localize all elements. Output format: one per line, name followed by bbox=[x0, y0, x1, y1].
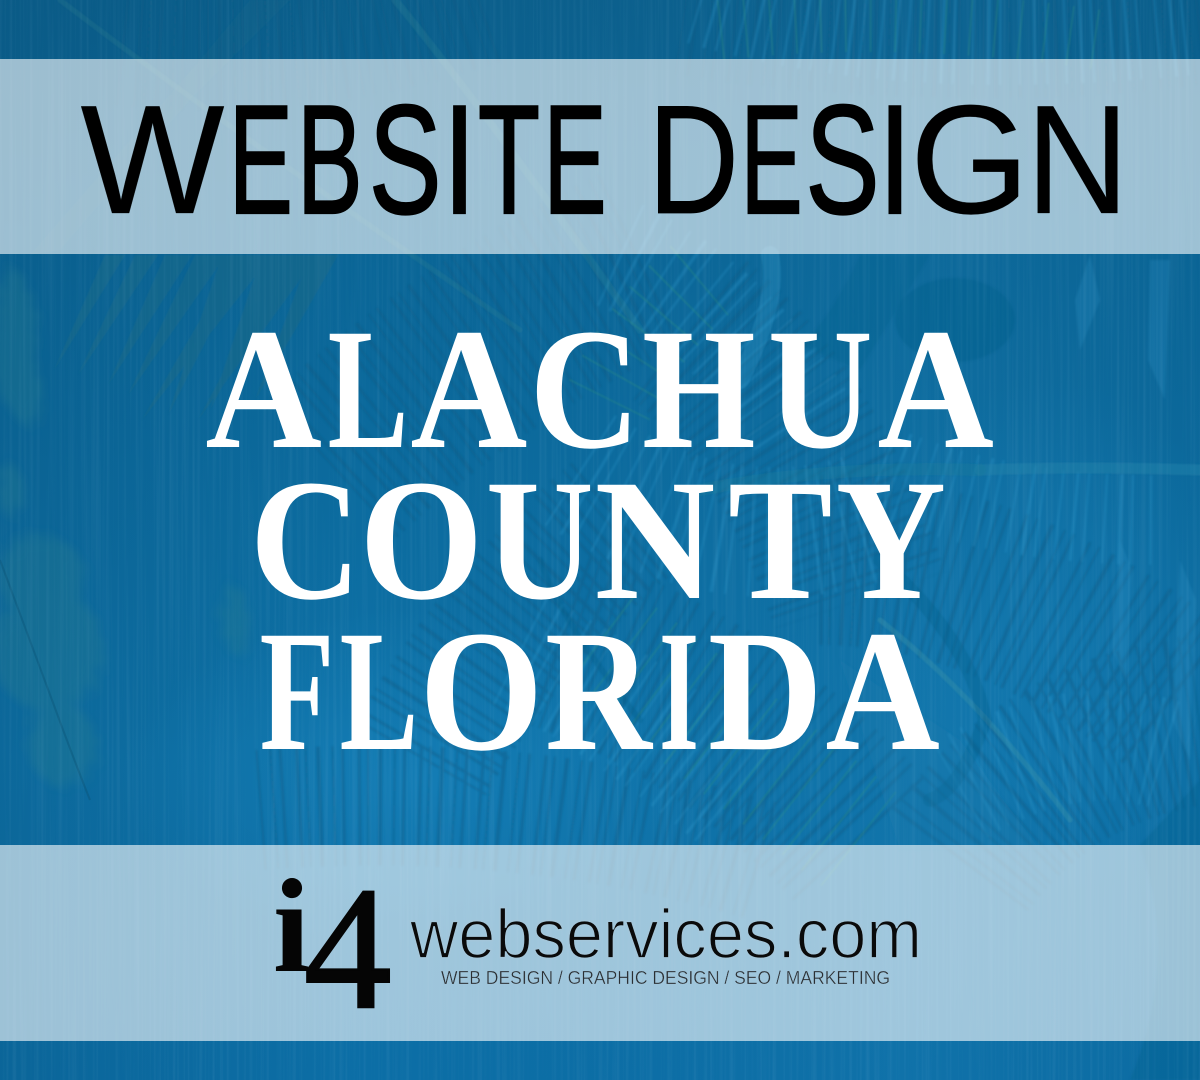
heading: website design: S bbox=[369, 73, 441, 246]
title line: alachua: L bbox=[328, 294, 408, 485]
left moss foliage bbox=[0, 270, 249, 787]
bottom translucent band bbox=[0, 845, 1200, 1041]
title line: county: T bbox=[728, 445, 832, 636]
title: alachua county florida bbox=[205, 294, 994, 787]
title line: alachua: C bbox=[529, 294, 640, 485]
heading: website design: N bbox=[1026, 73, 1129, 246]
title line: alachua: U bbox=[768, 294, 873, 485]
footer logo: i4 webservices.com bbox=[273, 851, 922, 1045]
title line: alachua: A bbox=[205, 294, 322, 485]
heading: website design: T bbox=[478, 73, 540, 246]
title line: alachua: A bbox=[877, 294, 994, 485]
title line: florida: F bbox=[260, 596, 334, 787]
palm frond combs dark bbox=[120, 0, 1200, 860]
palm frond combs light bbox=[520, 0, 1190, 800]
title line: florida: D bbox=[708, 596, 823, 787]
title line: county: U bbox=[486, 445, 594, 636]
pale right side blades bbox=[1075, 255, 1196, 760]
heading: website design: E bbox=[229, 73, 293, 246]
title line: alachua: H bbox=[642, 294, 756, 485]
title line: county: N bbox=[594, 445, 715, 636]
logo mark: i4: i bbox=[273, 852, 310, 1000]
title line: county: C bbox=[250, 445, 361, 636]
heading: website design: B bbox=[297, 73, 363, 246]
heading: website design: S bbox=[806, 73, 880, 246]
logo mark: i4: 4 bbox=[304, 851, 392, 1045]
title line: florida: I bbox=[659, 596, 699, 787]
heading: website design: G bbox=[910, 73, 1030, 246]
logo wordmark: webservices.com bbox=[409, 895, 922, 973]
upper left palm blades bbox=[30, 0, 338, 420]
title line: florida: L bbox=[340, 596, 418, 787]
title line: alachua: A bbox=[410, 294, 527, 485]
dark palm crown shapes bbox=[800, 255, 1200, 1080]
title line: florida: R bbox=[545, 596, 654, 787]
title line: county: Y bbox=[836, 445, 946, 636]
heading: website design: W bbox=[80, 73, 224, 246]
heading: website design: I bbox=[878, 73, 911, 246]
tagline: WEB DESIGN / GRAPHIC DESIGN / SEO / MARKETING bbox=[441, 968, 890, 988]
heading: website design: D bbox=[648, 73, 739, 246]
title line: county: O bbox=[359, 445, 483, 636]
heading: website design: E bbox=[741, 73, 803, 246]
heading: website design: E bbox=[544, 73, 606, 246]
title line: florida: A bbox=[825, 596, 940, 787]
title line: florida: O bbox=[419, 596, 543, 787]
left branch bbox=[0, 560, 90, 800]
heading: website design: I bbox=[443, 73, 476, 246]
top translucent band bbox=[0, 59, 1200, 254]
palm rachis lines and large blades bbox=[60, 0, 1200, 820]
greenish leaflets bbox=[600, 22, 1100, 840]
